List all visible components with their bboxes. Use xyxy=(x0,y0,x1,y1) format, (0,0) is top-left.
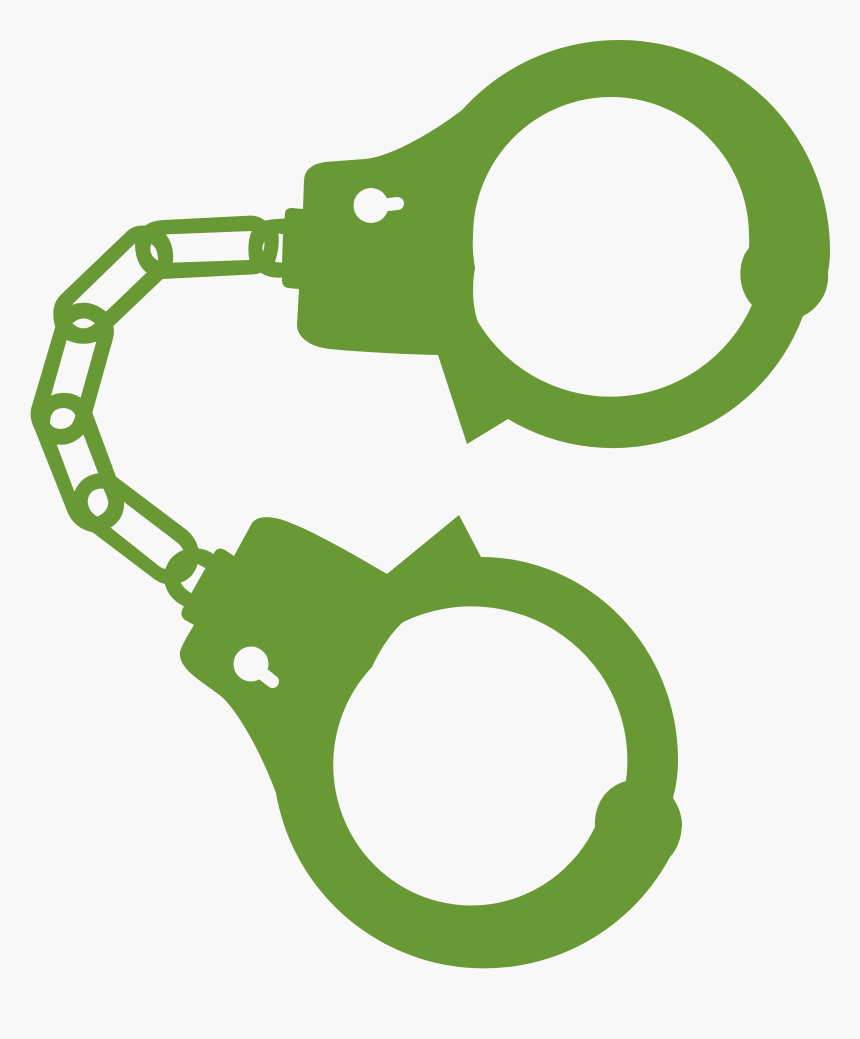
chain linking the two cuffs xyxy=(31,216,293,613)
top cuff keyhole xyxy=(354,188,404,223)
top cuff xyxy=(282,40,830,448)
bottom cuff keyhole xyxy=(234,646,279,688)
bottom cuff xyxy=(180,515,682,968)
